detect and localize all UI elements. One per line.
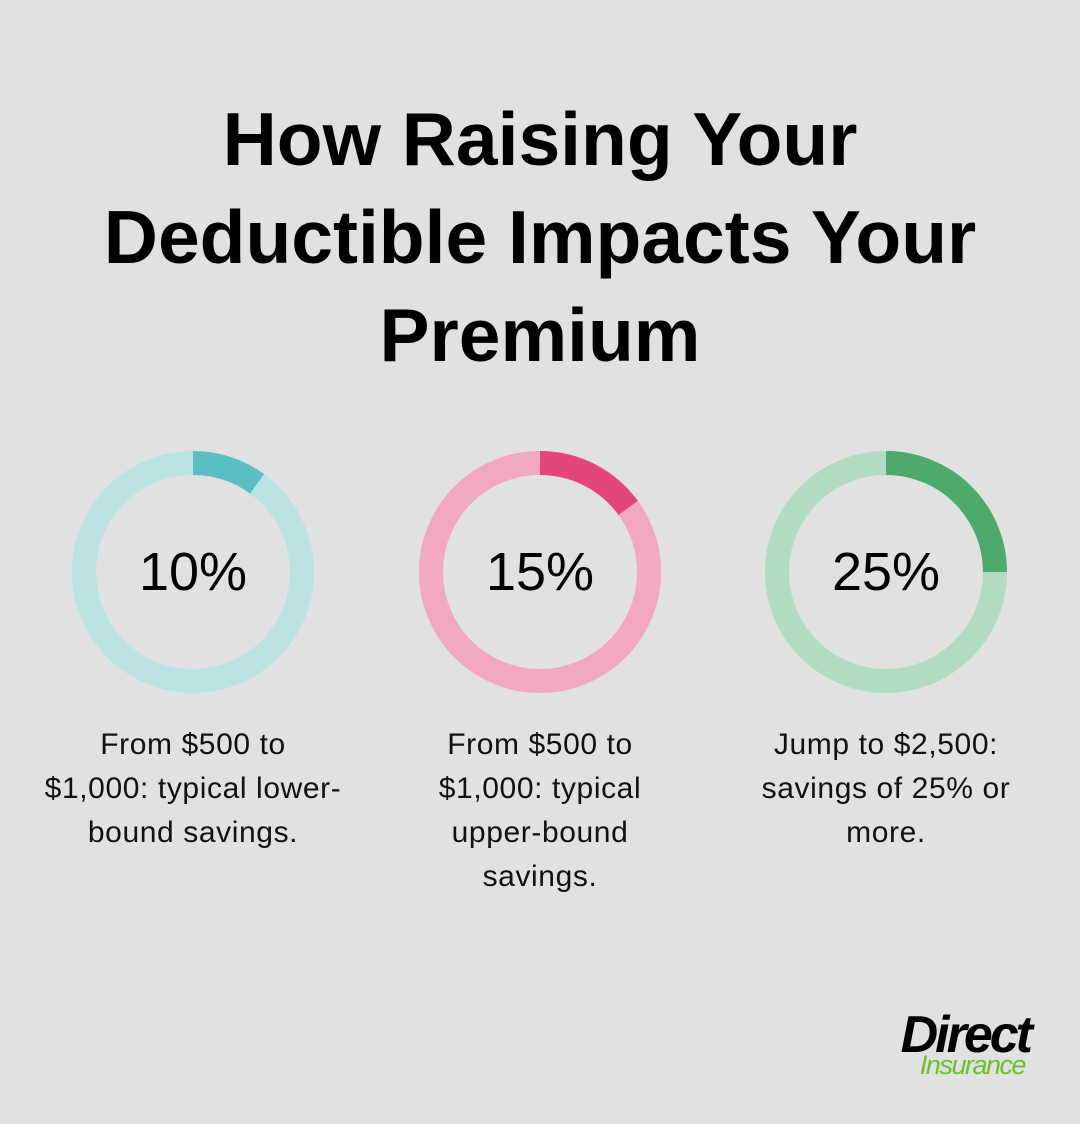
- description: 15%: From $500 to: [447, 728, 633, 761]
- title: [104, 97, 976, 377]
- description: 15%: [439, 728, 641, 893]
- description: 25%: savings of 25% or: [762, 772, 1010, 805]
- description: 15%: upper-bound: [452, 816, 628, 849]
- description: 25%: [762, 728, 1010, 849]
- title: Deductible Impacts Your: [104, 195, 976, 279]
- ring chart: 15%: [419, 451, 661, 693]
- description: 25%: Jump to $2,500:: [774, 728, 998, 761]
- ring chart: 15%: 15%: [486, 542, 594, 602]
- logo: Direct Insurance: Direct: [901, 1006, 1030, 1064]
- description: 10%: From $500 to: [100, 728, 286, 761]
- title: How Raising Your: [223, 97, 857, 181]
- logo: Direct Insurance: Insurance: [920, 1050, 1025, 1080]
- ring chart: 10%: [72, 451, 314, 693]
- description: 15%: savings.: [483, 860, 597, 893]
- description: 10%: $1,000: typical lower-: [45, 772, 341, 805]
- ring chart: 25%: [765, 451, 1007, 693]
- description: 10%: bound savings.: [88, 816, 298, 849]
- ring chart: 25%: 25%: [832, 542, 940, 602]
- title: Premium: [380, 293, 700, 377]
- description: 25%: more.: [846, 816, 926, 849]
- ring chart: 10%: 10%: [139, 542, 247, 602]
- description: 15%: $1,000: typical: [439, 772, 641, 805]
- description: 10%: [45, 728, 341, 849]
